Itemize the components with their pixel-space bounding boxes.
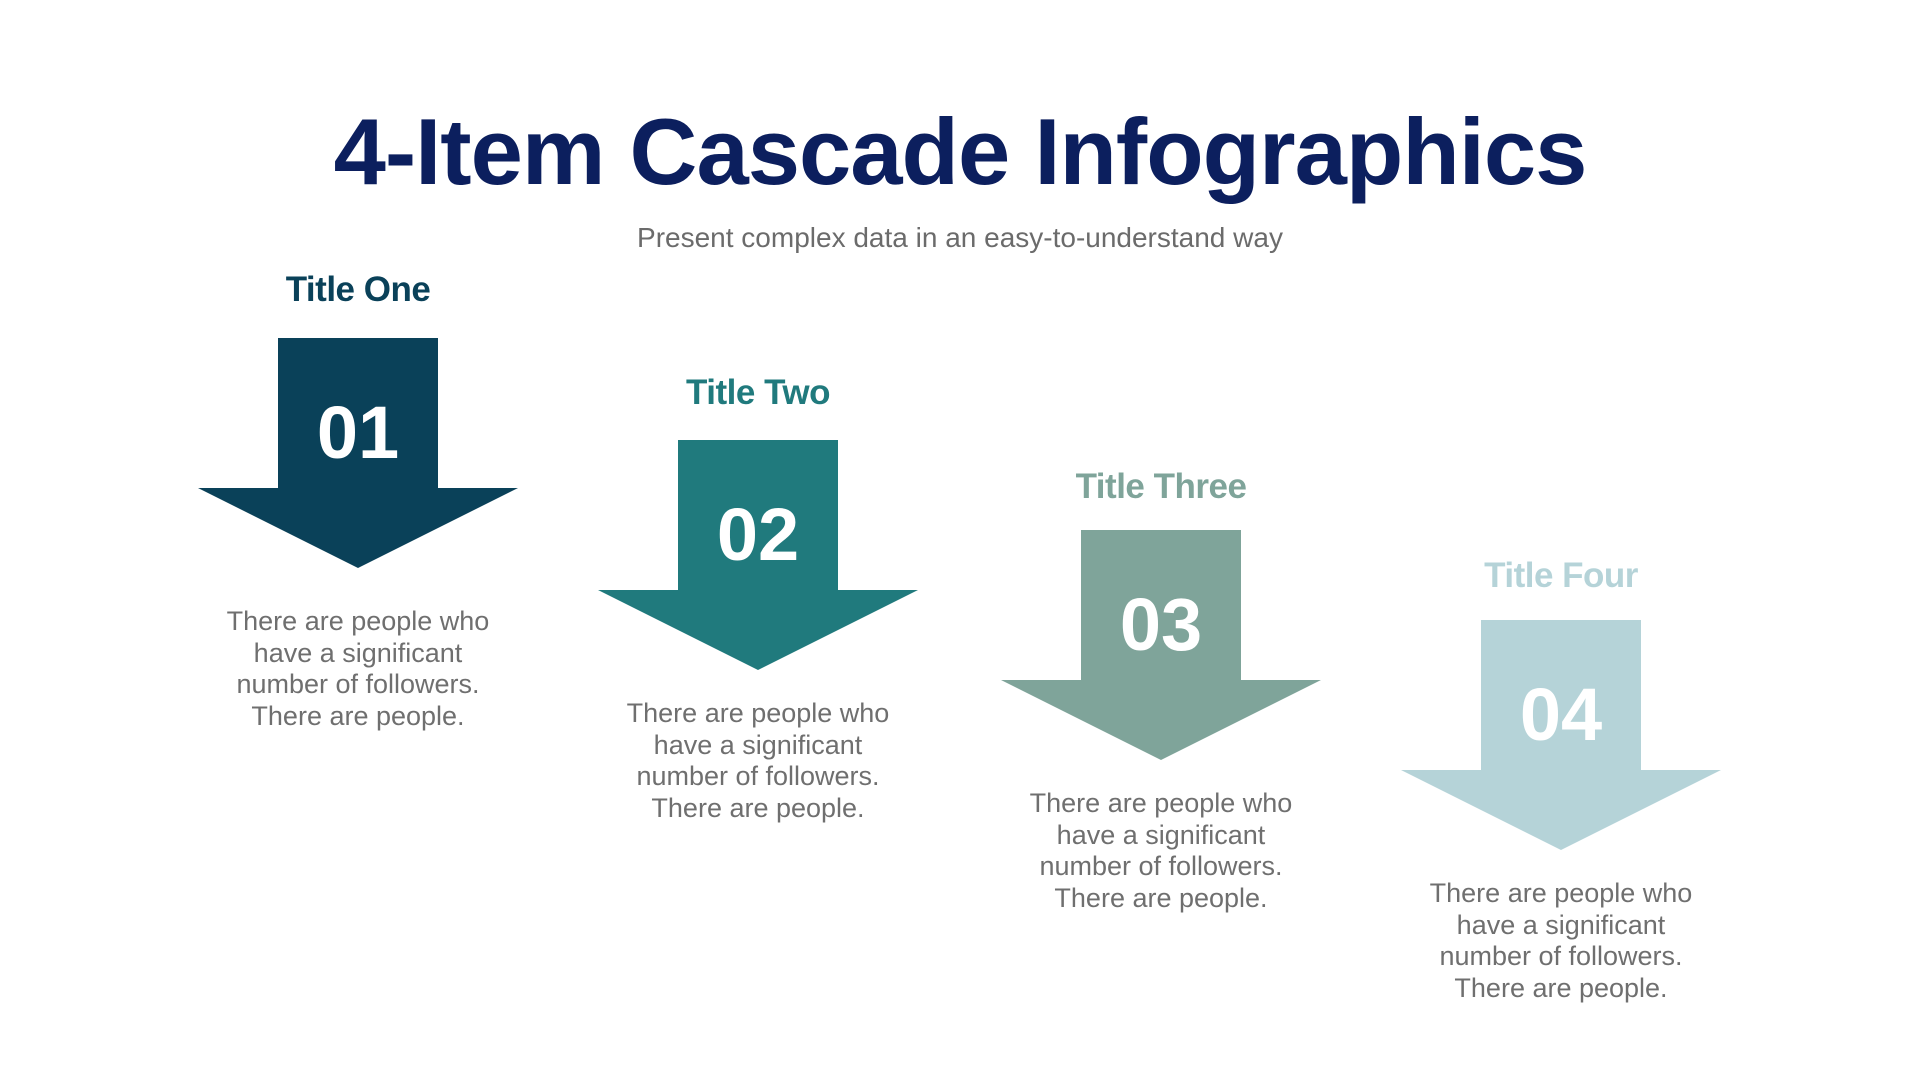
arrow 03 bbox=[1001, 530, 1321, 760]
arrow 02 bbox=[598, 440, 918, 670]
body text 1: There are people. bbox=[251, 700, 465, 730]
body text 3: number of followers. bbox=[1039, 851, 1283, 881]
heading: Title Two: Title Two bbox=[686, 373, 830, 412]
arrow 02: 02 bbox=[717, 493, 799, 576]
body text 1 bbox=[227, 606, 489, 730]
body text 1: have a significant bbox=[254, 638, 462, 668]
body text 1: number of followers. bbox=[236, 669, 480, 699]
body text 4: number of followers. bbox=[1439, 941, 1683, 971]
body text 3 bbox=[1030, 788, 1292, 912]
arrow 03: 03 bbox=[1120, 583, 1202, 666]
body text 2: have a significant bbox=[654, 730, 862, 760]
title: 4-Item Cascade Infographics bbox=[334, 99, 1586, 204]
item 1 bbox=[198, 270, 518, 730]
item 2 bbox=[598, 373, 918, 822]
body text 4: have a significant bbox=[1457, 910, 1665, 940]
heading: Title Three: Title Three bbox=[1076, 467, 1246, 506]
body text 2 bbox=[627, 698, 889, 822]
arrow 04 bbox=[1401, 620, 1721, 850]
heading: Title Four: Title Four bbox=[1484, 556, 1638, 595]
body text 2: There are people. bbox=[651, 792, 865, 822]
body text 1: There are people who bbox=[227, 606, 489, 636]
heading: Title One: Title One bbox=[286, 270, 430, 309]
body text 2: number of followers. bbox=[636, 761, 880, 791]
body text 3: There are people who bbox=[1030, 788, 1292, 818]
item 3 bbox=[1001, 467, 1321, 912]
body text 4: There are people who bbox=[1430, 878, 1692, 908]
body text 4 bbox=[1430, 878, 1692, 1002]
subtitle: Present complex data in an easy-to-understand way bbox=[637, 222, 1283, 253]
arrow 04: 04 bbox=[1520, 673, 1602, 756]
body text 4: There are people. bbox=[1454, 972, 1668, 1002]
arrow 01: 01 bbox=[317, 391, 399, 474]
body text 3: There are people. bbox=[1054, 882, 1268, 912]
arrow 01 bbox=[198, 338, 518, 568]
item 4 bbox=[1401, 556, 1721, 1002]
body text 2: There are people who bbox=[627, 698, 889, 728]
body text 3: have a significant bbox=[1057, 820, 1265, 850]
